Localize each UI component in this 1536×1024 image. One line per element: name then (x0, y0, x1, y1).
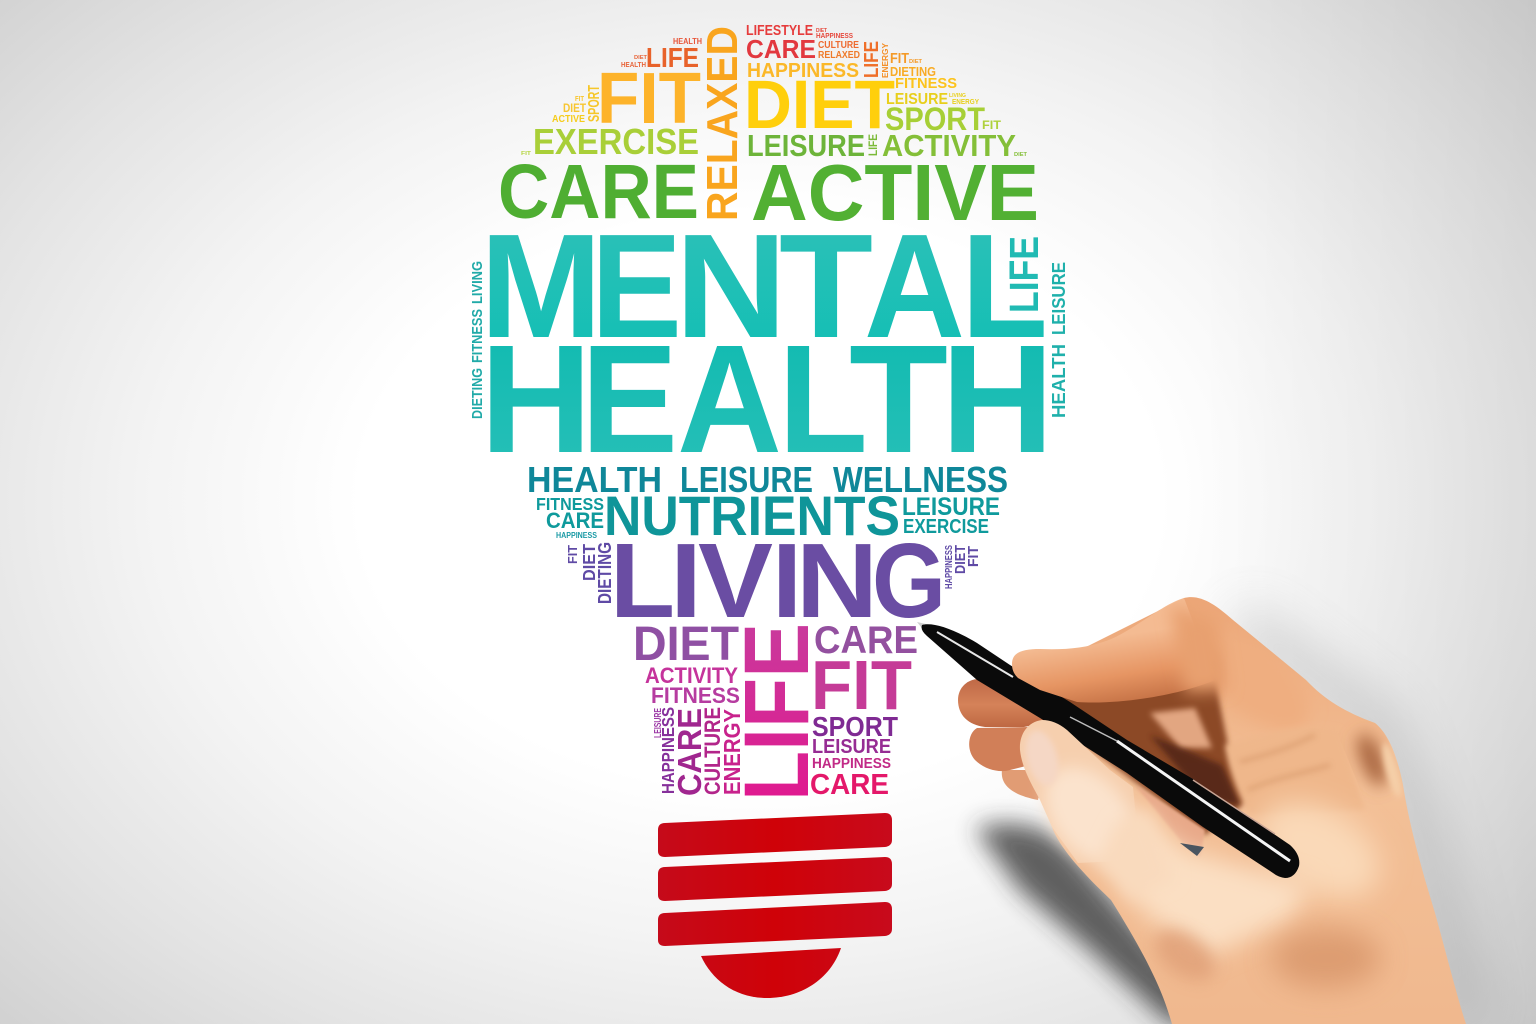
middle finger (958, 679, 1060, 727)
shade: lower hand tan (1271, 928, 1381, 988)
word: HAPPINESS: HAPPINESS (812, 756, 891, 772)
hand shading (1062, 680, 1401, 996)
shade: creased palm fold (1222, 742, 1362, 812)
word: CARE red: CARE (810, 769, 889, 801)
word: CARE: CARE (546, 508, 604, 533)
base bar 3 (658, 902, 892, 946)
blend: thumb into lower hand (1094, 810, 1158, 900)
word: LEISURE: LEISURE (902, 494, 1000, 521)
title word: MENTAL: A (864, 204, 965, 369)
word: DIET orange: DIET (909, 59, 922, 65)
word: LIVING: I (772, 522, 802, 640)
word: DIETING vertical: DIETING (595, 542, 616, 604)
infographic illustration (472, 25, 1487, 1024)
word: FIT vertical: FIT (565, 545, 580, 564)
word: LIFESTYLE: LIFESTYLE (746, 23, 813, 39)
shade: deep shadow near pen (1150, 735, 1240, 805)
word: DIET tiny: DIET (816, 28, 827, 34)
word: SPORT: SPORT (885, 101, 985, 137)
word: LIVING vertical teal: LIVING (470, 261, 486, 304)
word: DIET right vertical: DIET (953, 545, 969, 574)
word: HAPPINESS: HAPPINESS (747, 60, 859, 82)
word: HEALTH: HEALTH (673, 36, 702, 46)
title word: MENTAL: L (961, 204, 1048, 369)
word: WELLNESS row: WELLNESS (833, 459, 1008, 500)
word: DIET tiny green: DIET (1014, 152, 1027, 158)
word: EXERCISE: EXERCISE (903, 516, 989, 538)
pinky finger (1002, 770, 1045, 800)
word: NUTRIENTS: NUTRIENTS (604, 485, 900, 547)
word: FITNESS: FITNESS (536, 494, 604, 514)
word: LIFE: LIFE (646, 42, 699, 73)
word: ENERGY vertical: ENERGY (719, 709, 745, 795)
pen gap shadow (1180, 843, 1204, 856)
title word: MENTAL: T (779, 204, 873, 369)
pen highlight middle (1070, 717, 1117, 741)
base bar 2 (658, 857, 892, 901)
word: ENERGY tiny: ENERGY (952, 97, 979, 106)
blend: index finger into back of hand (1170, 605, 1228, 692)
shade: pale skin below pen (1256, 792, 1387, 906)
hand holding the pen (917, 597, 1466, 1024)
word: FITNESS: FITNESS (651, 683, 740, 708)
shade: pale thumb base (1120, 800, 1310, 960)
pen (917, 622, 1299, 878)
word cloud: bulb top, warm words (498, 23, 1039, 237)
shade: dark hollow under index finger (1060, 680, 1248, 835)
shade: light patch in hollow (1150, 708, 1212, 748)
word: ENERGY vertical: ENERGY (880, 43, 890, 78)
word: LIVING: L (610, 522, 675, 640)
word: ACTIVE green: ACTIVE (751, 148, 1039, 237)
title word: HEALTH: H (941, 313, 1054, 485)
word: LIFE small vertical: LIFE (867, 134, 880, 156)
blend overlays softening hard edges (1095, 605, 1228, 900)
bulb base: red screw bars and dome (658, 813, 892, 998)
shade: hand web (1140, 790, 1206, 855)
word: FIT orange: FIT (890, 51, 909, 67)
word: CARE: CARE (746, 34, 816, 64)
ring finger (969, 727, 1030, 771)
word: HAPPINESS vertical: HAPPINESS (658, 707, 678, 794)
pen highlight lower (1117, 741, 1290, 861)
title word: MENTAL: M (480, 204, 602, 369)
word: DIET vertical: DIET (579, 544, 599, 581)
word: CARE vertical: CARE (672, 708, 709, 796)
word: DIET: DIET (744, 67, 895, 143)
pen body (922, 624, 1299, 878)
word: DIET: DIET (634, 55, 647, 61)
word: FIT lime: FIT (982, 119, 1001, 132)
hand shadow on the paper (975, 620, 1470, 1024)
title word: HEALTH: T (849, 313, 948, 485)
word: CULTURE vertical: CULTURE (700, 707, 725, 795)
word: FITNESS vertical teal: FITNESS (470, 309, 486, 363)
back of hand (1038, 597, 1466, 1024)
word: HEALTH row: HEALTH (527, 459, 662, 500)
word: ACTIVE small: ACTIVE (552, 114, 585, 125)
thumb (1020, 720, 1140, 863)
shade: knuckle highlight (1380, 742, 1402, 795)
word: HAPPINESS vertical: HAPPINESS (944, 545, 955, 589)
word: FIT magenta: FIT (811, 646, 912, 724)
word: LEISURE: LEISURE (812, 736, 891, 758)
pen tip (917, 622, 926, 632)
pen highlight upper (937, 632, 1013, 677)
word: ACTIVITY: ACTIVITY (645, 663, 738, 688)
base dome (701, 948, 841, 998)
word: LIVING tiny: LIVING (949, 93, 966, 99)
word: LEISURE vertical teal: LEISURE (1049, 262, 1070, 335)
shadow: main cast shadow (975, 823, 1215, 1024)
title word: HEALTH: A (677, 313, 782, 485)
title word: MENTAL: E (591, 204, 682, 369)
title word: HEALTH: L (778, 313, 868, 485)
word: LEISURE yellow: LEISURE (886, 91, 948, 108)
shade: finger fold (1190, 640, 1215, 700)
word: LEISURE row: LEISURE (680, 459, 813, 500)
word: DIET purple: DIET (633, 618, 739, 671)
word: FIT small: FIT (575, 94, 584, 103)
word cloud: neck teal and purple band (527, 459, 1008, 640)
word: LIFE vertical teal: LIFE (1001, 236, 1047, 313)
word: DIETING vertical teal: DIETING (470, 368, 486, 419)
word: LEISURE vertical: LEISURE (653, 708, 664, 738)
word: HAPPINESS tiny: HAPPINESS (556, 530, 597, 540)
word: EXERCISE: EXERCISE (533, 121, 699, 162)
title word: MENTAL: N (675, 204, 787, 369)
word: DIETING: DIETING (890, 64, 936, 79)
word: CULTURE: CULTURE (818, 40, 859, 51)
word: RELAXED: RELAXED (699, 26, 747, 221)
word: FITNESS: FITNESS (895, 76, 957, 92)
word: CARE green: CARE (498, 149, 699, 235)
crease lines (1240, 735, 1330, 790)
title word: HEALTH: E (581, 313, 678, 485)
word: ACTIVITY: ACTIVITY (882, 129, 1016, 163)
word: FIT right vertical: FIT (966, 546, 982, 567)
word: LEISURE green: LEISURE (747, 129, 865, 163)
word cloud: centre teal band (470, 204, 1070, 485)
word: LIVING: I (670, 522, 702, 640)
word: CARE purple: CARE (814, 619, 918, 662)
word: LIVING: G (872, 522, 946, 640)
word: LIFE vertical: LIFE (861, 41, 883, 78)
word: HAPPINESS tiny: HAPPINESS (816, 31, 853, 40)
word: FIT tiny: FIT (521, 151, 532, 157)
shade: wrist tan (1152, 922, 1219, 982)
index finger (1012, 598, 1215, 703)
pen clip highlight (1193, 780, 1275, 834)
word cloud: bulb neck, magenta words (633, 618, 918, 801)
word: HEALTH small: HEALTH (621, 60, 646, 69)
thumb pale centre (1027, 750, 1153, 880)
word: SPORT: SPORT (586, 85, 603, 122)
word: LIVING: N (796, 522, 878, 640)
thumb nail (1020, 727, 1064, 789)
shade: knuckle crease (1351, 730, 1393, 790)
word: LIFE vertical magenta: LIFE (726, 623, 828, 801)
base bar 1 (658, 813, 892, 857)
word: HEALTH vertical teal: HEALTH (1049, 344, 1070, 418)
shade: top of knuckles (1244, 696, 1301, 726)
word: DIET small: DIET (563, 102, 586, 115)
title word: HEALTH: H (480, 313, 592, 485)
shadow: right side halo (1240, 620, 1470, 1024)
word: LIVING: V (698, 522, 773, 640)
word: FIT: FIT (597, 58, 701, 139)
word: SPORT: SPORT (812, 711, 898, 742)
word: RELAXED small: RELAXED (818, 50, 860, 61)
